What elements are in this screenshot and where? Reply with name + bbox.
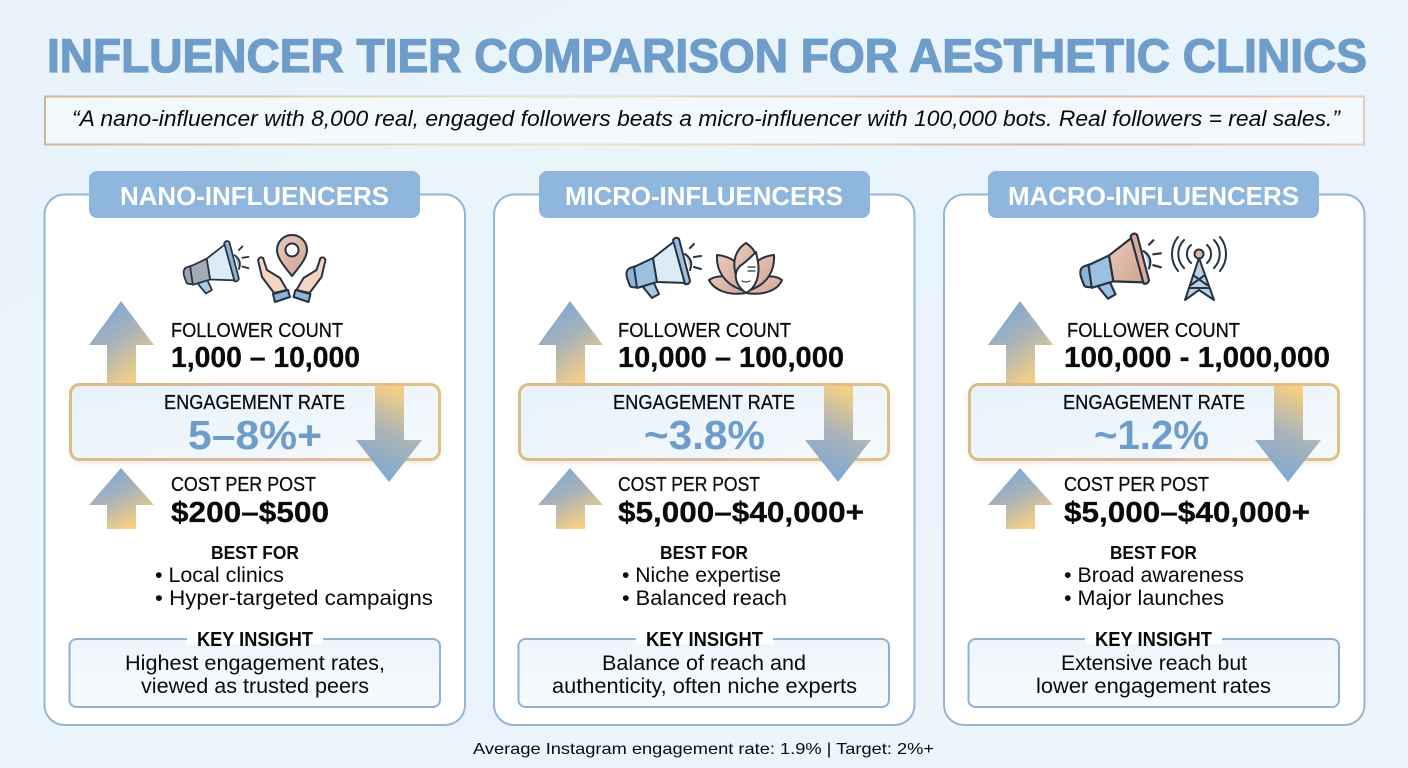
- footer note: Average Instagram engagement rate: 1.9% | Target: 2%+: [473, 741, 934, 758]
- cost per post: $200–$500: [171, 497, 329, 529]
- follower count: FOLLOWER COUNT: [171, 320, 343, 342]
- arrow: engagement down: [1255, 386, 1321, 482]
- key insight box: viewed as trusted peers: [141, 675, 369, 698]
- panel: micro-influencers: [494, 171, 914, 725]
- follower count: 100,000 - 1,000,000: [1064, 342, 1330, 374]
- engagement rate box: ENGAGEMENT RATE: [613, 392, 795, 414]
- arrow: follower count up: [538, 301, 603, 386]
- icon: location pin in hands: [258, 235, 326, 302]
- key insight box: Extensive reach but: [1061, 652, 1247, 675]
- cost per post: $5,000–$40,000+: [1064, 497, 1310, 529]
- key insight box: [968, 629, 1339, 707]
- icon: lotus face: [709, 243, 782, 294]
- follower count: 1,000 – 10,000: [171, 342, 360, 374]
- engagement rate box: [970, 384, 1338, 462]
- best for list: BEST FOR: [660, 543, 748, 563]
- heading: micro-influencers: MICRO-INFLUENCERS: [565, 181, 843, 211]
- icon: broadcast tower: [1172, 237, 1226, 300]
- heading: micro-influencers: [539, 171, 870, 218]
- engagement rate box: [520, 384, 888, 462]
- best for list: • Broad awareness: [1064, 564, 1244, 587]
- follower count: 10,000 – 100,000: [618, 342, 844, 374]
- follower count: [1064, 320, 1330, 374]
- cost per post: COST PER POST: [171, 474, 316, 496]
- engagement rate box: ~3.8%: [644, 412, 765, 458]
- engagement rate box: ~1.2%: [1094, 412, 1209, 458]
- cost per post: COST PER POST: [1064, 474, 1209, 496]
- heading: macro-influencers: MACRO-INFLUENCERS: [1008, 181, 1299, 211]
- follower count: FOLLOWER COUNT: [618, 320, 791, 342]
- follower count: FOLLOWER COUNT: [1067, 320, 1240, 342]
- arrow: engagement down: [805, 386, 871, 482]
- best for list: BEST FOR: [1110, 543, 1197, 563]
- key insight box: KEY INSIGHT: [1095, 629, 1212, 651]
- title: INFLUENCER TIER COMPARISON FOR AESTHETIC CLINICS: [47, 29, 1367, 82]
- cost per post: COST PER POST: [618, 474, 760, 496]
- engagement rate box: ENGAGEMENT RATE: [164, 392, 345, 414]
- best for list: • Major launches: [1064, 587, 1224, 610]
- best for list: • Hyper-targeted campaigns: [155, 587, 433, 610]
- icon: blue megaphone: [626, 238, 701, 298]
- heading: macro-influencers: [988, 171, 1319, 218]
- follower count: [618, 320, 844, 374]
- arrow: engagement down: [356, 386, 422, 482]
- cost per post: [1064, 474, 1310, 529]
- arrow: follower count up: [988, 301, 1053, 386]
- cost per post: [171, 474, 329, 529]
- engagement rate box: ENGAGEMENT RATE: [1063, 392, 1245, 414]
- arrow: cost per post up: [538, 468, 603, 529]
- key insight box: KEY INSIGHT: [197, 629, 313, 651]
- arrow: cost per post up: [988, 468, 1053, 529]
- quote callout: “A nano-influencer with 8,000 real, engaged followers beats a micro-influencer with 100,000 bots. Real followers = real sales.”: [72, 106, 1342, 131]
- engagement rate box: 5–8%+: [188, 412, 322, 458]
- icon: grey megaphone: [184, 241, 248, 293]
- cost per post: [618, 474, 864, 529]
- best for list: BEST FOR: [211, 543, 299, 563]
- best for list: [1064, 543, 1244, 610]
- key insight box: Highest engagement rates,: [125, 652, 385, 675]
- quote callout: [45, 96, 1364, 144]
- key insight box: authenticity, often niche experts: [552, 675, 857, 698]
- best for list: • Niche expertise: [622, 564, 781, 587]
- icon: rose megaphone: [1080, 234, 1161, 299]
- key insight box: lower engagement rates: [1036, 675, 1271, 698]
- arrow: cost per post up: [89, 468, 154, 529]
- engagement rate box: [70, 384, 440, 462]
- best for list: • Balanced reach: [622, 587, 787, 610]
- key insight box: Balance of reach and: [602, 652, 806, 675]
- key insight box: [518, 629, 889, 707]
- heading: nano-influencers: [89, 171, 420, 218]
- arrow: follower count up: [89, 301, 154, 386]
- cost per post: $5,000–$40,000+: [618, 497, 864, 529]
- best for list: [155, 543, 433, 610]
- key insight box: KEY INSIGHT: [646, 629, 763, 651]
- heading: nano-influencers: NANO-INFLUENCERS: [120, 181, 389, 211]
- best for list: • Local clinics: [155, 564, 284, 587]
- follower count: [171, 320, 360, 374]
- panel: nano-influencers: [44, 171, 465, 725]
- key insight box: [70, 629, 440, 707]
- panel: macro-influencers: [944, 171, 1364, 725]
- best for list: [622, 543, 787, 610]
